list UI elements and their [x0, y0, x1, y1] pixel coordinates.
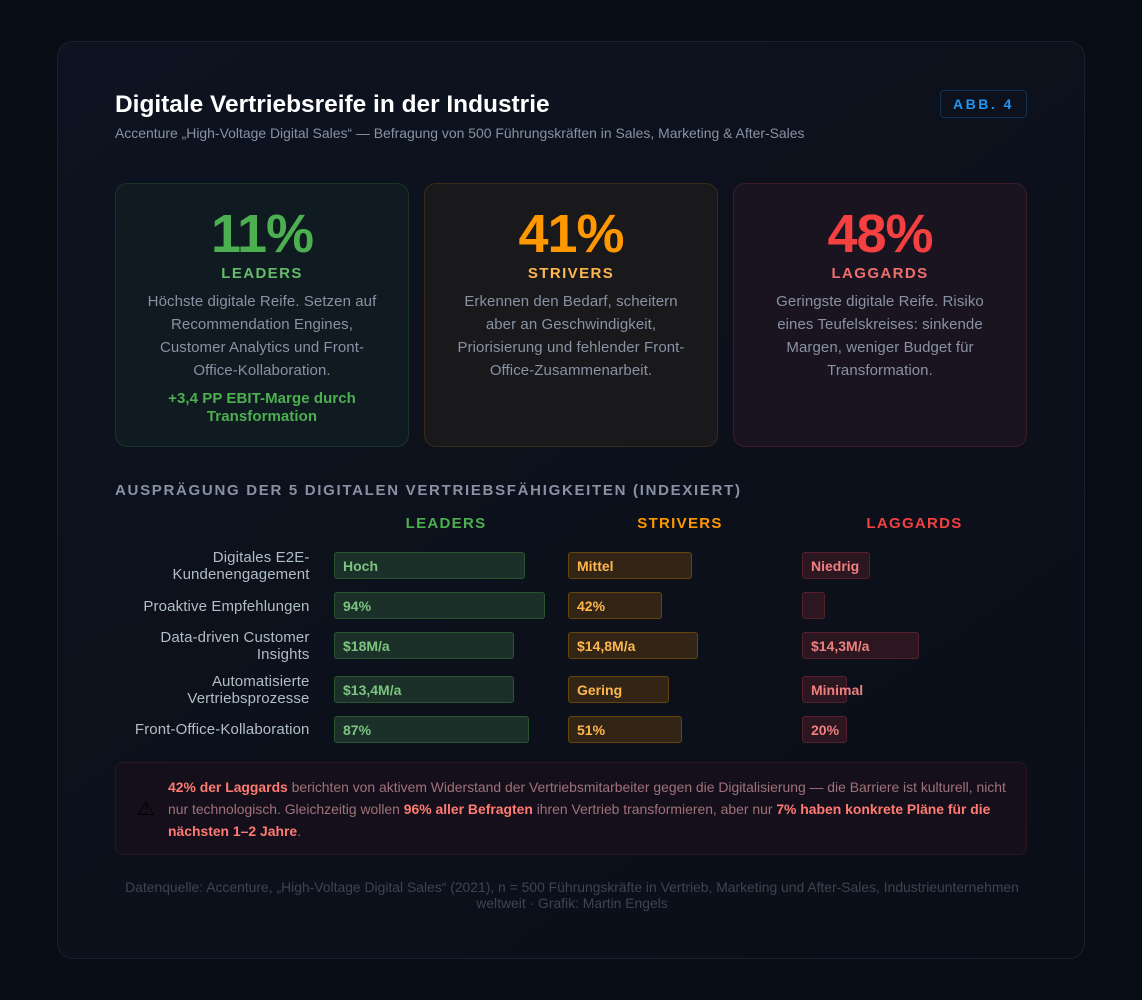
- laggards description: Transformation.: [827, 362, 933, 378]
- bar: leaders e2e: [334, 552, 525, 579]
- label: insights: [160, 629, 310, 663]
- leaders name: LEADERS: [221, 265, 303, 282]
- bar: laggards kollaboration: 20%: [811, 722, 839, 738]
- bar: laggards insights: $14,3M/a: [811, 638, 869, 654]
- bar: laggards empfehlungen: [802, 592, 825, 619]
- leaders description: Höchste digitale Reife. Setzen auf: [148, 292, 376, 310]
- label: prozesse: Vertriebsprozesse: [187, 690, 310, 707]
- column header: laggards: LAGGARDS: [866, 514, 963, 532]
- strivers name: STRIVERS: [528, 265, 614, 282]
- label: e2e: Digitales E2E-: [213, 549, 310, 566]
- bar: leaders empfehlungen: 94%: [343, 598, 371, 614]
- laggards description: eines Teufelskreises: sinkende: [777, 316, 983, 332]
- bar: strivers empfehlungen: 42%: [577, 598, 605, 614]
- bar: laggards insights: [802, 632, 919, 659]
- bar: laggards e2e: [802, 552, 870, 579]
- footer source: weltweit · Grafik: Martin Engels: [476, 895, 668, 911]
- callout text: nächsten 1–2 Jahre.: [168, 823, 301, 839]
- strivers description: Erkennen den Bedarf, scheitern: [464, 292, 678, 310]
- bar: leaders empfehlungen: [334, 592, 545, 619]
- leaders description: Recommendation Engines,: [171, 316, 353, 332]
- column header: leaders: LEADERS: [406, 514, 486, 532]
- label: insights: Insights: [257, 646, 310, 663]
- bars: laggards: [802, 552, 919, 743]
- figure badge: ABB. 4: [953, 96, 1014, 112]
- leaders highlight: +3,4 PP EBIT-Marge durch: [168, 390, 356, 406]
- bar: laggards prozesse: [802, 676, 847, 703]
- laggards name: LAGGARDS: [831, 265, 929, 282]
- label: kollaboration: Front-Office-Kollaboration: [135, 721, 310, 738]
- strivers description: Priorisierung und fehlender Front-: [457, 338, 684, 356]
- strivers description: [457, 292, 684, 378]
- laggards description: [776, 292, 984, 378]
- leaders description: [148, 292, 376, 378]
- callout text: 42% der Laggards berichten von aktivem Widerstand der Vertriebsmitarbeiter gegen die Digitalisierung — die Barriere ist kulturell, nicht: [168, 779, 1006, 795]
- label: insights: Data-driven Customer: [160, 629, 310, 646]
- label: prozesse: Automatisierte: [212, 673, 310, 690]
- bar: strivers insights: $14,8M/a: [577, 638, 635, 654]
- panel: strivers: [424, 183, 718, 447]
- bar: strivers prozesse: Gering: [577, 682, 622, 698]
- label: empfehlungen: Proaktive Empfehlungen: [143, 598, 310, 614]
- bar: strivers e2e: [568, 552, 692, 579]
- bar: leaders kollaboration: 87%: [343, 722, 371, 738]
- bar: leaders insights: $18M/a: [343, 638, 390, 654]
- bar: leaders e2e: Hoch: [343, 558, 378, 574]
- bar: leaders kollaboration: [334, 716, 529, 743]
- leaders description: Office-Kollaboration.: [193, 362, 331, 378]
- label: e2e: Kundenengagement: [172, 566, 310, 583]
- subtitle: Accenture „High-Voltage Digital Sales“ — Befragung von 500 Führungskräften in Sales, Marketing & After-Sales: [115, 125, 804, 141]
- bar: strivers kollaboration: [568, 716, 682, 743]
- icon: warning: ⚠: [137, 796, 155, 820]
- figure badge: [940, 90, 1027, 118]
- strivers share: 41%: [518, 204, 624, 264]
- panel: laggards: [733, 183, 1027, 447]
- bar: leaders insights: [334, 632, 514, 659]
- strivers description: Office-Zusammenarbeit.: [490, 362, 652, 378]
- bar: strivers e2e: Mittel: [577, 558, 614, 574]
- bar: leaders prozesse: [334, 676, 514, 703]
- bar: laggards prozesse: Minimal: [811, 682, 863, 698]
- leaders share: 11%: [211, 204, 313, 264]
- laggards description: Geringste digitale Reife. Risiko: [776, 292, 984, 310]
- laggards description: Margen, weniger Budget für: [786, 338, 974, 356]
- footer source: Datenquelle: Accenture, „High-Voltage Digital Sales“ (2021), n = 500 Führungskräfte in Vertrieb, Marketing und After-Sales, Industrieunternehmen: [125, 879, 1019, 895]
- bar: strivers prozesse: [568, 676, 669, 703]
- bar: strivers insights: [568, 632, 698, 659]
- section heading: AUSPRÄGUNG DER 5 DIGITALEN VERTRIEBSFÄHIGKEITEN (INDEXIERT): [115, 482, 742, 498]
- bars: leaders: [334, 552, 545, 743]
- bar: laggards e2e: Niedrig: [811, 558, 859, 574]
- row labels: [135, 549, 310, 738]
- leaders highlight: [168, 390, 356, 424]
- column header: strivers: STRIVERS: [637, 514, 723, 532]
- strivers description: aber an Geschwindigkeit,: [486, 316, 656, 332]
- laggards share: 48%: [827, 204, 933, 264]
- bar: laggards kollaboration: [802, 716, 847, 743]
- callout: [115, 762, 1027, 855]
- bar: strivers kollaboration: 51%: [577, 722, 605, 738]
- bar: leaders prozesse: $13,4M/a: [343, 682, 401, 698]
- footer source: [125, 879, 1019, 911]
- label: prozesse: [187, 673, 310, 707]
- panel: leaders: [115, 183, 409, 447]
- callout text: [168, 779, 1006, 839]
- bars: strivers: [568, 552, 698, 743]
- leaders highlight: Transformation: [207, 408, 317, 424]
- title: Digitale Vertriebsreife in der Industrie: [115, 91, 550, 118]
- bar: strivers empfehlungen: [568, 592, 662, 619]
- leaders description: Customer Analytics und Front-: [160, 338, 364, 356]
- label: e2e: [172, 549, 310, 583]
- callout text: nur technologisch. Gleichzeitig wollen 96% aller Befragten ihren Vertrieb transformieren, aber nur 7% haben konkrete Pläne für die: [168, 801, 990, 817]
